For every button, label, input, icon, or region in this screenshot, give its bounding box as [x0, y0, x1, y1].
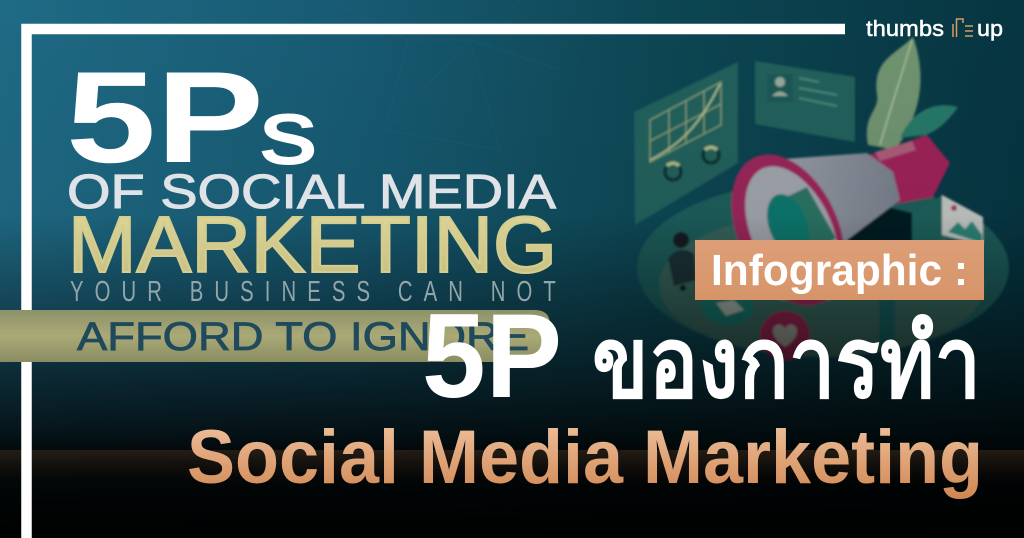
platform ellipse	[637, 180, 1009, 357]
logo: thumbs up: thumbs	[866, 16, 944, 41]
figure: person center	[879, 300, 895, 352]
illustration: social media megaphone scene	[634, 37, 1009, 361]
subtitle: of social media: OF SOCIAL MEDIA	[67, 166, 556, 219]
panel: profile card	[755, 61, 855, 142]
logo title: 5Ps: 5P	[66, 44, 264, 190]
figure: person left	[668, 232, 696, 291]
heading: 5P in Thai	[422, 289, 981, 423]
icon: heart bubble	[760, 311, 810, 361]
logo title: 5Ps: s	[260, 83, 317, 183]
white frame	[26, 29, 845, 538]
heading: 5P in Thai: 5P	[422, 289, 562, 423]
icon: chat bubble	[702, 291, 754, 325]
heading: social media marketing: Social Media Marketing	[187, 415, 983, 500]
logo: thumbs up: up	[977, 16, 1003, 41]
icon: leaves	[867, 37, 958, 150]
icon: image card	[912, 195, 983, 250]
banner: afford to ignore: AFFORD TO IGNORE	[77, 315, 529, 359]
logo title: 5Ps	[66, 44, 317, 190]
label box: infographic: Infographic :	[711, 246, 968, 295]
logo: thumbs up	[866, 16, 1003, 41]
panel: analytics chart	[634, 62, 738, 225]
subtitle: your business can not: YOUR BUSINESS CAN NOT	[70, 276, 556, 308]
donut gauges	[665, 147, 719, 180]
subtitle: marketing: MARKETING	[68, 200, 557, 289]
icon: megaphone	[709, 135, 950, 324]
banner: afford to ignore	[0, 310, 550, 362]
